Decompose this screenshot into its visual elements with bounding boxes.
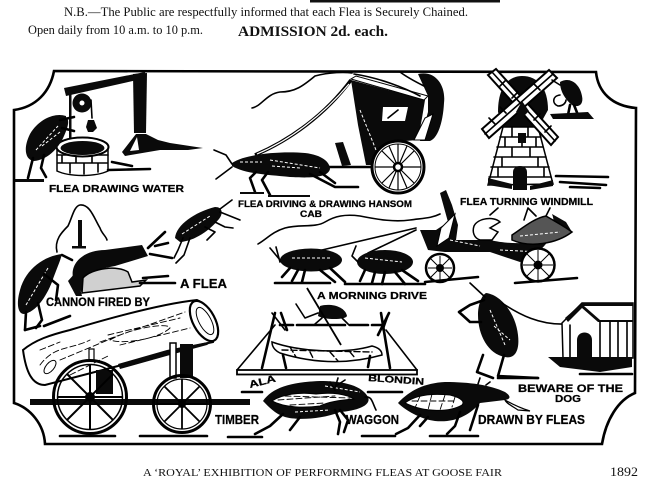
flea at well bbox=[15, 115, 74, 182]
cab bbox=[335, 72, 444, 166]
cannon hill bbox=[56, 205, 107, 252]
long reins bbox=[258, 214, 440, 244]
opening hours: Open daily from 10 a.m. to 10 p.m. bbox=[28, 23, 203, 37]
label bbox=[46, 277, 227, 309]
scene: cannon fired by a flea bbox=[18, 200, 240, 330]
admission price: ADMISSION 2d. each. bbox=[238, 24, 388, 40]
labels: WAGGON bbox=[346, 413, 399, 427]
scene: flea turning windmill bbox=[460, 69, 608, 208]
large wheel bbox=[54, 360, 126, 434]
labels: ALA bbox=[248, 374, 277, 391]
scene: flea driving hansom cab bbox=[214, 72, 444, 220]
log bbox=[23, 296, 224, 385]
labels: TIMBER bbox=[215, 412, 260, 427]
well bbox=[56, 138, 150, 176]
trestle bbox=[237, 313, 417, 374]
label: DOG bbox=[555, 393, 581, 405]
scene: flea drawing water bbox=[15, 72, 203, 195]
well post and beam bbox=[64, 72, 203, 156]
dog flea bbox=[459, 283, 538, 378]
year: 1892 bbox=[610, 465, 638, 479]
flea firing cannon bbox=[18, 254, 72, 330]
notice line: N.B.—The Public are respectfully informed that each Flea is Securely Chained. bbox=[64, 4, 468, 19]
label bbox=[238, 199, 412, 220]
label bbox=[518, 383, 623, 405]
cab wheel bbox=[372, 141, 424, 193]
label: A MORNING DRIVE bbox=[317, 290, 427, 302]
label: FLEA DRAWING WATER bbox=[49, 183, 184, 195]
labels bbox=[215, 373, 585, 427]
label: CAB bbox=[300, 209, 322, 220]
label: FLEA DRIVING & DRAWING HANSOM bbox=[238, 199, 412, 210]
rear flea bbox=[255, 378, 376, 434]
header: notice text bbox=[28, 0, 500, 40]
labels: DRAWN BY FLEAS bbox=[478, 412, 585, 427]
flea at windmill bbox=[550, 80, 594, 119]
leash bbox=[502, 303, 565, 324]
scene: timber waggon bbox=[23, 296, 585, 437]
kennel bbox=[548, 303, 633, 374]
axle and support bbox=[30, 343, 262, 437]
label: A FLEA bbox=[180, 277, 227, 291]
label: FLEA TURNING WINDMILL bbox=[460, 197, 593, 208]
label: BEWARE OF THE bbox=[518, 383, 623, 395]
windmill ground bbox=[556, 176, 608, 188]
scene: beware of the dog bbox=[459, 283, 633, 405]
two pulling fleas bbox=[270, 246, 425, 284]
small wheel bbox=[154, 376, 210, 432]
poster frame bbox=[14, 71, 636, 444]
caption: A ‘ROYAL’ EXHIBITION OF PERFORMING FLEAS AT GOOSE FAIR bbox=[143, 468, 502, 479]
windmill sails bbox=[482, 69, 558, 145]
standing flea bbox=[174, 200, 240, 263]
labels: BLONDIN bbox=[368, 373, 425, 388]
hammock bbox=[272, 342, 382, 368]
cannon barrel bbox=[68, 232, 175, 296]
pulling shafts bbox=[322, 228, 416, 253]
shafts and reins bbox=[252, 72, 370, 167]
label: CANNON FIRED BY bbox=[46, 297, 150, 309]
carriage wheels bbox=[425, 248, 577, 283]
shell carriage bbox=[420, 190, 572, 262]
rope bbox=[242, 391, 402, 393]
balancing flea bbox=[296, 288, 349, 345]
front flea bbox=[362, 378, 530, 436]
windmill tower bbox=[488, 76, 553, 190]
scene: tightrope hammock bbox=[237, 288, 417, 374]
scene: morning drive carriage bbox=[258, 190, 577, 302]
driving flea bbox=[214, 150, 358, 197]
